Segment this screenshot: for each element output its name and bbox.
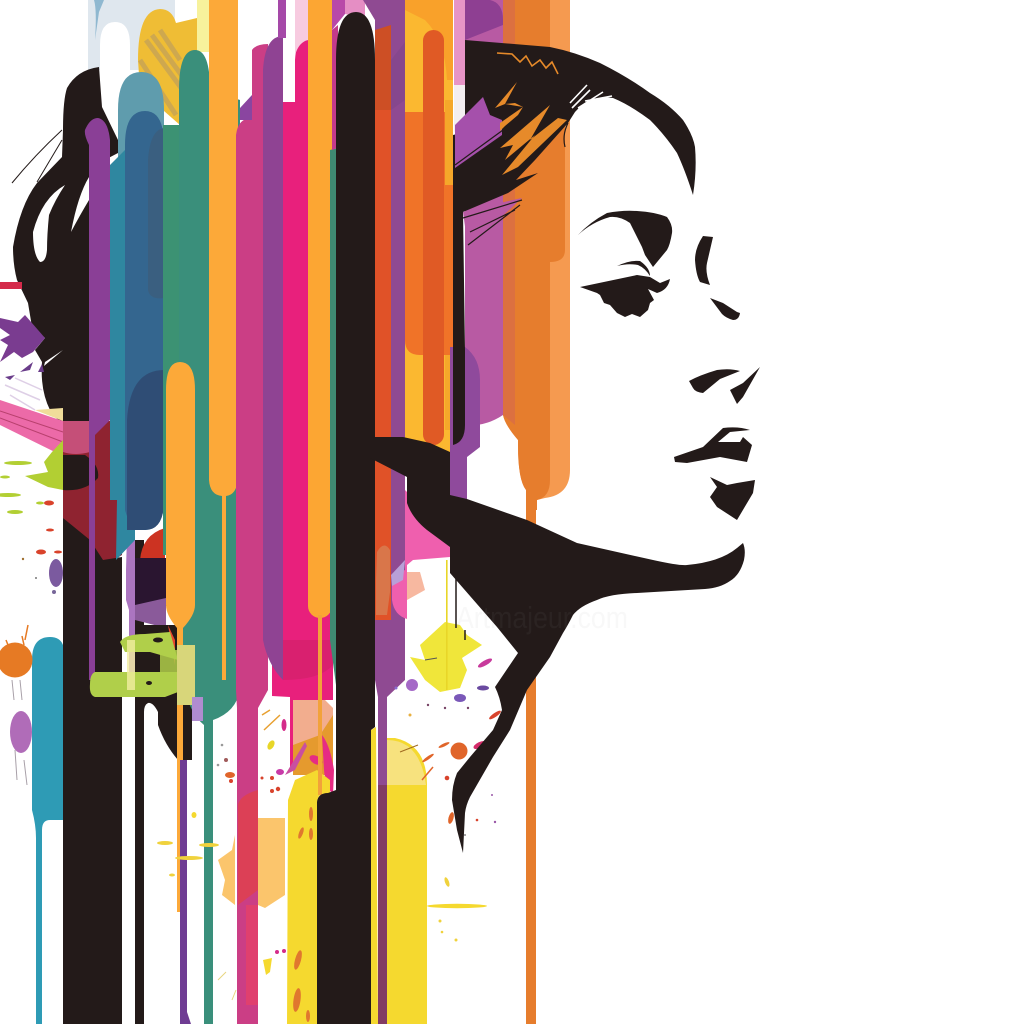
nose	[689, 367, 760, 404]
green tall columns	[163, 50, 240, 1024]
lilac thin drip	[126, 535, 135, 690]
scattered paint spatter on the right	[394, 657, 502, 942]
peach and orange paint patch	[293, 700, 333, 775]
pink and white top pieces	[454, 0, 465, 134]
orange smudge on red stripe	[376, 545, 390, 615]
closed eye with lashes	[580, 261, 670, 317]
red accent beside orange drip	[168, 625, 175, 665]
amber strip at right of stripes	[445, 100, 453, 430]
red orange rounded stripe	[423, 30, 444, 445]
yellow column with drips	[287, 770, 330, 1024]
short orange column with drip	[166, 362, 195, 912]
top amber column	[405, 0, 453, 470]
top purple sliver	[278, 0, 286, 38]
long orange column with drip	[209, 0, 238, 680]
orange columns behind the face	[503, 0, 570, 1024]
red and dark patches behind stripes	[122, 500, 167, 690]
pink paint splash	[285, 735, 346, 795]
purple panel behind hair	[450, 0, 503, 500]
spatter around the middle stripes	[157, 710, 286, 1000]
black column at left	[63, 518, 122, 1024]
feathered purple mark	[391, 560, 405, 586]
lime paint strokes	[90, 632, 195, 705]
small purple cap	[240, 95, 252, 120]
top orange band	[405, 0, 453, 80]
right eyebrow fragment	[695, 236, 713, 285]
red line and purple splash at left	[0, 282, 45, 410]
red overlay on magenta drip	[238, 790, 258, 1005]
yellow splash under jaw	[410, 560, 482, 692]
lilac patch and thin purple drip	[180, 697, 203, 1024]
navy shade in blue column	[127, 128, 164, 530]
lime splash at left	[0, 440, 63, 514]
orange top square end and drip	[308, 0, 332, 795]
pink diagonal stripes at left	[0, 400, 63, 456]
black blob with white arch	[143, 625, 192, 760]
left hair silhouette	[12, 67, 118, 421]
right lash fragment	[710, 298, 740, 320]
red orange stripe	[375, 110, 391, 620]
green sliver and magenta sliver	[330, 0, 365, 700]
hair streaks	[455, 53, 612, 248]
purple top stripe	[363, 0, 405, 1024]
dark red panel	[63, 421, 122, 570]
translucent teal column	[118, 72, 164, 450]
yellow hatched blob at top	[138, 0, 209, 125]
head and hair silhouette	[453, 40, 696, 445]
pale orange splash	[218, 818, 285, 908]
teal left side band	[110, 150, 135, 560]
purple diagonal sheen	[391, 42, 405, 110]
blue column	[125, 111, 164, 530]
pale blue fade at top	[88, 0, 197, 75]
purple column	[263, 36, 283, 680]
watermark: Artmajeur.com	[456, 600, 628, 635]
magenta column	[236, 44, 268, 1024]
small red spatter at left	[22, 500, 62, 594]
hot pink column	[272, 40, 333, 770]
peach spot	[407, 572, 425, 600]
darker pink overlap	[283, 640, 333, 680]
orange top stripe	[308, 0, 332, 618]
pale pink top pieces	[295, 0, 308, 55]
black smudge over red panel	[63, 455, 98, 490]
white top gap	[286, 0, 295, 102]
pink block below hair	[63, 421, 90, 454]
yellow column bottom right	[371, 727, 427, 1024]
pink shape under neck	[392, 490, 450, 619]
thin black column	[135, 540, 144, 1024]
orange and purple blots at left	[0, 559, 63, 785]
purple stripe with thin drip	[85, 118, 110, 680]
main black column	[317, 12, 375, 1024]
left eyebrow	[578, 211, 672, 267]
neck and shoulder silhouette	[370, 437, 745, 853]
darker orange cap	[375, 25, 391, 110]
bright orange block	[405, 112, 453, 355]
teal drip column at left	[32, 637, 63, 1024]
lower lip	[710, 477, 755, 520]
upper lip	[674, 427, 752, 463]
